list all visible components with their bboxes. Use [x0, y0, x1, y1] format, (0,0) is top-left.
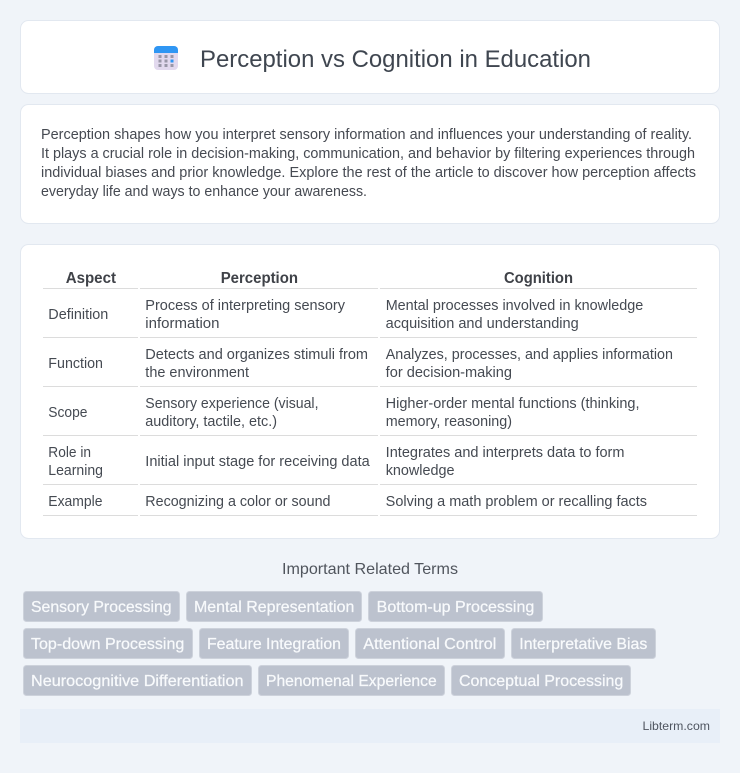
table header: Aspect: [66, 270, 117, 287]
table header: Cognition: [504, 270, 573, 287]
table row: role in learning: Learning: [48, 463, 103, 479]
table row: role in learning: [43, 445, 697, 485]
table row: example: Recognizing a color or sound: [145, 494, 330, 510]
title: Perception vs Cognition in Education: [200, 46, 591, 73]
tag: top-down processing: [24, 628, 192, 658]
tag: feature integration: Feature Integration: [207, 636, 341, 653]
panel: introduction: [20, 104, 720, 224]
footer credit: Libterm.com: [642, 719, 710, 733]
table header: [43, 270, 697, 289]
tag: interpretative bias: Interpretative Bias: [519, 636, 647, 653]
tag: conceptual processing: Conceptual Processing: [459, 673, 623, 690]
tag: phenomenal experience: Phenomenal Experience: [266, 673, 437, 690]
table row: definition: Process of interpreting sensory: [145, 298, 346, 314]
table row: definition: acquisition and understanding: [386, 316, 579, 332]
tag: phenomenal experience: [258, 666, 444, 696]
table row: function: Detects and organizes stimuli from: [145, 347, 368, 363]
table row: function: [43, 347, 697, 387]
tag: mental representation: Mental Representation: [194, 599, 354, 616]
table row: definition: information: [145, 316, 220, 332]
text block: introduction paragraph: It plays a crucial role in decision-making, communication, and behavior by filtering experiences through: [41, 146, 695, 162]
table row: definition: Mental processes involved in knowledge: [386, 298, 643, 314]
text block: introduction paragraph: everyday life and ways to enhance your awareness.: [41, 184, 367, 200]
table row: definition: Definition: [48, 307, 108, 323]
table row: definition: [43, 298, 697, 338]
table row: function: the environment: [145, 365, 249, 381]
tag: bottom-up processing: [368, 592, 542, 622]
table row: scope: Higher-order mental functions (thinking,: [386, 396, 640, 412]
panel: comparison table: [20, 244, 720, 538]
tag: conceptual processing: [452, 666, 630, 696]
text block: introduction paragraph: individual biases and prior knowledge. Explore the rest of the article to discover how perception affects: [41, 165, 696, 181]
table row: role in learning: Role in: [48, 445, 91, 461]
table row: function: Function: [48, 356, 103, 372]
table row: scope: [43, 396, 697, 436]
icon: calendar: [154, 46, 178, 70]
panel: title card: [20, 20, 720, 94]
table row: function: for decision-making: [386, 365, 512, 381]
tag: mental representation: [186, 592, 362, 622]
table row: scope: Scope: [48, 405, 88, 421]
tag: attentional control: Attentional Control: [363, 636, 496, 653]
tag group: related terms: [24, 592, 656, 696]
table row: example: Example: [48, 494, 102, 510]
table row: role in learning: knowledge: [386, 463, 454, 479]
table header: Perception: [221, 270, 298, 287]
tag: bottom-up processing: Bottom-up Processing: [377, 599, 534, 616]
table row: function: Analyzes, processes, and applies information: [386, 347, 673, 363]
table row: role in learning: Integrates and interprets data to form: [386, 445, 625, 461]
tag: interpretative bias: [512, 628, 656, 658]
text block: introduction paragraph: [41, 127, 696, 200]
table row: scope: Sensory experience (visual,: [145, 396, 318, 412]
table row: scope: memory, reasoning): [386, 414, 512, 430]
footer: [20, 709, 720, 743]
tag: neurocognitive differentiation: Neurocognitive Differentiation: [31, 673, 243, 690]
text block: introduction paragraph: Perception shapes how you interpret sensory information and influences your understanding of reality.: [41, 127, 692, 143]
tag: neurocognitive differentiation: [24, 666, 252, 696]
table row: role in learning: Initial input stage for receiving data: [145, 454, 370, 470]
tag: attentional control: [356, 628, 504, 658]
table row: example: Solving a math problem or recalling facts: [386, 494, 647, 510]
tag: top-down processing: Top-down Processing: [31, 636, 184, 653]
table row: example: [43, 494, 697, 516]
tag: feature integration: [200, 628, 348, 658]
heading: important related terms: Important Related Terms: [282, 561, 458, 578]
table row: scope: auditory, tactile, etc.): [145, 414, 277, 430]
tag: sensory processing: Sensory Processing: [31, 599, 172, 616]
tag: sensory processing: [24, 592, 180, 622]
